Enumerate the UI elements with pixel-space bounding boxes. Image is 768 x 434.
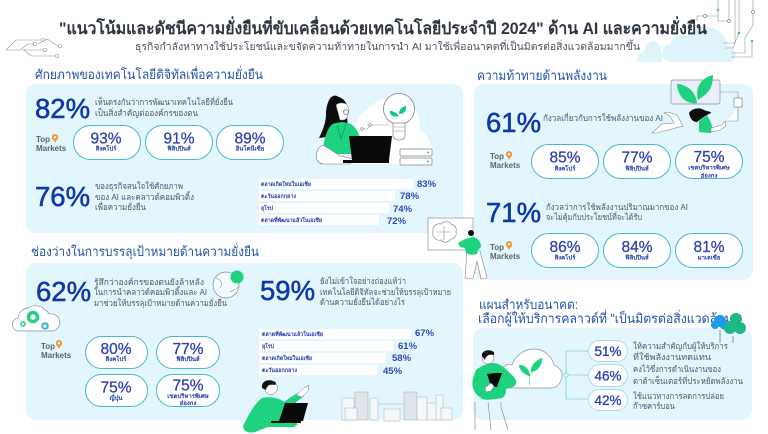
market pills: 86% (549, 239, 581, 256)
market pills: 89% (234, 130, 266, 148)
bar chart 76%: 78% (400, 191, 420, 202)
top markets label: Markets (490, 161, 521, 170)
market pills: 75% (693, 149, 725, 166)
heading: future plan: แผนสำหรับอนาคต: (479, 297, 578, 312)
icon: circuit left (6, 38, 62, 58)
text 59%: ด้านความยั่งยืนได้อย่างไร (320, 296, 405, 307)
text list: คงไว้ซึ่งการดำเนินงานของ (633, 363, 721, 374)
text 76%: เพื่อความยั่งยืน (95, 201, 146, 212)
icon: globe with leaf (213, 270, 244, 298)
text 62% (94, 277, 227, 309)
text list: ก๊าซคาร์บอน (633, 401, 675, 411)
bar chart 76%: 72% (387, 216, 407, 227)
bar chart 59%: ตลาดที่พัฒนาแล้วในเอเชีย (262, 330, 323, 338)
market pills: เขตบริหารพิเศษ (167, 392, 209, 400)
text 59%: เทคโนโลยีดิจิทัลจะช่วยให้บรรลุเป้าหมาย (320, 287, 451, 298)
market pills: ฟิลิปปินส์ (625, 164, 649, 172)
market pills: อินโดนีเซีย (235, 144, 265, 152)
top markets label: Markets (490, 252, 521, 261)
stat 82%: 82% (35, 93, 90, 124)
market pills: มาเลเซีย (698, 254, 721, 262)
stat 59%: 59% (260, 275, 315, 306)
stat pills (588, 340, 628, 410)
text list: ดาต้าเซ็นเตอร์ที่ประหยัดพลังงาน (633, 375, 743, 386)
text 59%: ยังไม่เข้าใจอย่างถ่องแท้ว่า (320, 276, 406, 286)
top markets label: Top (490, 152, 504, 161)
market pills (532, 144, 742, 180)
stat 61%: 61% (486, 107, 541, 138)
title: "แนวโน้มและดัชนีความยั่งยืนที่ขับเคลื่อนด้วยเทคโนโลยีประจำปี 2024" ด้าน AI และความยั่งยืน (59, 16, 707, 38)
panel: future plan (473, 328, 752, 420)
heading: energy: ความท้าทายด้านพลังงาน (477, 68, 607, 83)
bar chart 59%: ยุโรป (262, 342, 274, 350)
bar chart 59%: 61% (398, 341, 418, 352)
icon: clouds and circuit top right (637, 0, 754, 62)
text 61%: กังวลเกี่ยวกับการใช้พลังงานของ AI (543, 112, 663, 123)
bar chart 76%: 83% (417, 179, 437, 190)
market pills (86, 336, 220, 407)
market pills: 75% (172, 378, 204, 394)
illustration: woman with laptop and bulb (316, 94, 432, 165)
stat 71%: 71% (486, 197, 541, 228)
illustration: battery plant (671, 75, 742, 107)
top markets label: Top (490, 243, 504, 252)
text 76%: ของ AI และคลาวด์คอมพิวติ้ง (95, 191, 194, 202)
illustration: city buildings (342, 392, 452, 421)
market pills: เขตบริหารพิเศษ (688, 164, 730, 172)
illustration: woman reading on laptop (652, 107, 738, 133)
top markets label (490, 151, 521, 170)
top markets label: Markets (36, 144, 67, 153)
bar chart 59%: 45% (383, 366, 403, 377)
top markets label (490, 241, 521, 261)
stat pills: 42% (594, 393, 622, 408)
text 62%: รู้สึกว่าองค์กรของตนยังล้าหลัง (94, 277, 204, 288)
heading: goal gap: ช่องว่างในการบรรลุเป้าหมายด้านความยั่งยืน (31, 243, 259, 260)
text 82% (95, 96, 233, 118)
market pills: 93% (90, 130, 122, 148)
market pills: สิงคโปร์ (95, 144, 117, 152)
market pills: ฮ่องกง (701, 172, 717, 180)
bar chart 76%: ตลาดที่พัฒนาแล้วในเอเชีย (261, 216, 322, 224)
text list (633, 341, 743, 411)
heading: future plan (478, 297, 737, 327)
illustration: person with brain board (428, 218, 487, 279)
illustration: man with tablet and cloud (472, 349, 562, 430)
market pills: 77% (621, 150, 653, 166)
bar chart 59%: ตะวันออกกลาง (262, 367, 297, 374)
heading: digital potential: ศักยภาพของเทคโนโลยีดิจิทัลเพื่อความยั่งยืน (35, 66, 263, 82)
market pills (532, 234, 742, 268)
text 76%: ของธุรกิจสนใจใช้ศักยภาพ (95, 181, 183, 192)
panel: goal gap (12, 263, 463, 421)
market pills: 84% (621, 239, 653, 256)
text 82%: เห็นตรงกันว่าการพัฒนาเทคโนโลยีที่ยั่งยืน (95, 96, 233, 107)
text 71% (546, 202, 688, 223)
market pills: 80% (100, 341, 132, 358)
market pills: ฟิลิปปินส์ (176, 355, 200, 363)
text 76% (95, 181, 194, 212)
market pills: 77% (172, 341, 204, 358)
market pills: ฮ่องกง (180, 400, 196, 407)
bar chart 76%: 74% (393, 204, 413, 215)
icon: trees (711, 313, 746, 343)
market pills (74, 126, 284, 160)
text list: ให้ความสำคัญกับผู้ให้บริการ (633, 341, 728, 352)
top markets label: Top (36, 135, 50, 144)
stat pills: 46% (594, 368, 622, 384)
heading: future plan: เลือกผู้ให้บริการคลาวด์ที่ "เป็นมิตรต่อสิ่งแวดล้อม" (478, 309, 737, 327)
text 82%: เป็นสิ่งสำคัญต่อองค์กรของตน (95, 107, 198, 118)
text 62%: ในการนำคลาวด์คอมพิวติ้งและ AI (94, 286, 207, 297)
market pills: สิงคโปร์ (554, 164, 576, 172)
panel: digital potential (26, 84, 463, 233)
stat pills: 51% (594, 344, 622, 359)
panel: energy (474, 75, 753, 280)
market pills: ฟิลิปปินส์ (625, 254, 649, 262)
subtitle: ธุรกิจกำลังหาทางใช้ประโยชน์และขจัดความท้าทายในการนำ AI มาใช้เพื่ออนาคตที่เป็นมิตรต่อสิ่งแวดล้อมมากขึ้น (135, 39, 640, 53)
market pills: 75% (100, 380, 132, 396)
bar chart 76%: ยุโรป (261, 204, 273, 212)
top markets label: Markets (41, 351, 72, 360)
illustration: man with laptop pointing (243, 380, 309, 433)
bar chart 59% (259, 328, 435, 377)
bar chart 76%: ตลาดเกิดใหม่ในเอเชีย (261, 180, 311, 188)
top markets label (41, 340, 72, 360)
bar chart 76%: ตะวันออกกลาง (261, 193, 296, 200)
bar chart 59%: 58% (392, 353, 412, 364)
market pills: สิงคโปร์ (554, 254, 576, 262)
market pills: 91% (163, 130, 195, 148)
bar chart 76% (259, 179, 437, 227)
stat 62%: 62% (36, 276, 91, 307)
market pills: 85% (549, 150, 581, 166)
market pills: 81% (693, 239, 725, 256)
text 71%: จะไม่คุ้มกับประโยชน์ที่จะได้รับ (546, 211, 642, 223)
market pills: ญี่ปุ่น (109, 393, 123, 402)
top markets label: Top (41, 342, 55, 351)
icon: cloud with gears (12, 306, 60, 331)
text list: ใช้แนวทางการลดการปล่อย (633, 391, 724, 401)
top markets label (36, 134, 67, 153)
text 62%: มาช่วยให้บรรลุเป้าหมายด้านความยั่งยืน (94, 297, 227, 309)
bar chart 59%: 67% (415, 328, 435, 339)
market pills: สิงคโปร์ (105, 355, 127, 363)
text 71%: กังวลว่าการใช้พลังงานปริมาณมากของ AI (546, 202, 688, 212)
text list: ที่ใช้พลังงานทดแทน (633, 351, 711, 362)
bar chart 59%: ตลาดเกิดใหม่ในเอเชีย (262, 354, 312, 362)
market pills: ฟิลิปปินส์ (167, 144, 191, 152)
connector lines (564, 351, 588, 399)
text 59% (320, 276, 451, 307)
stat 76%: 76% (35, 181, 90, 212)
